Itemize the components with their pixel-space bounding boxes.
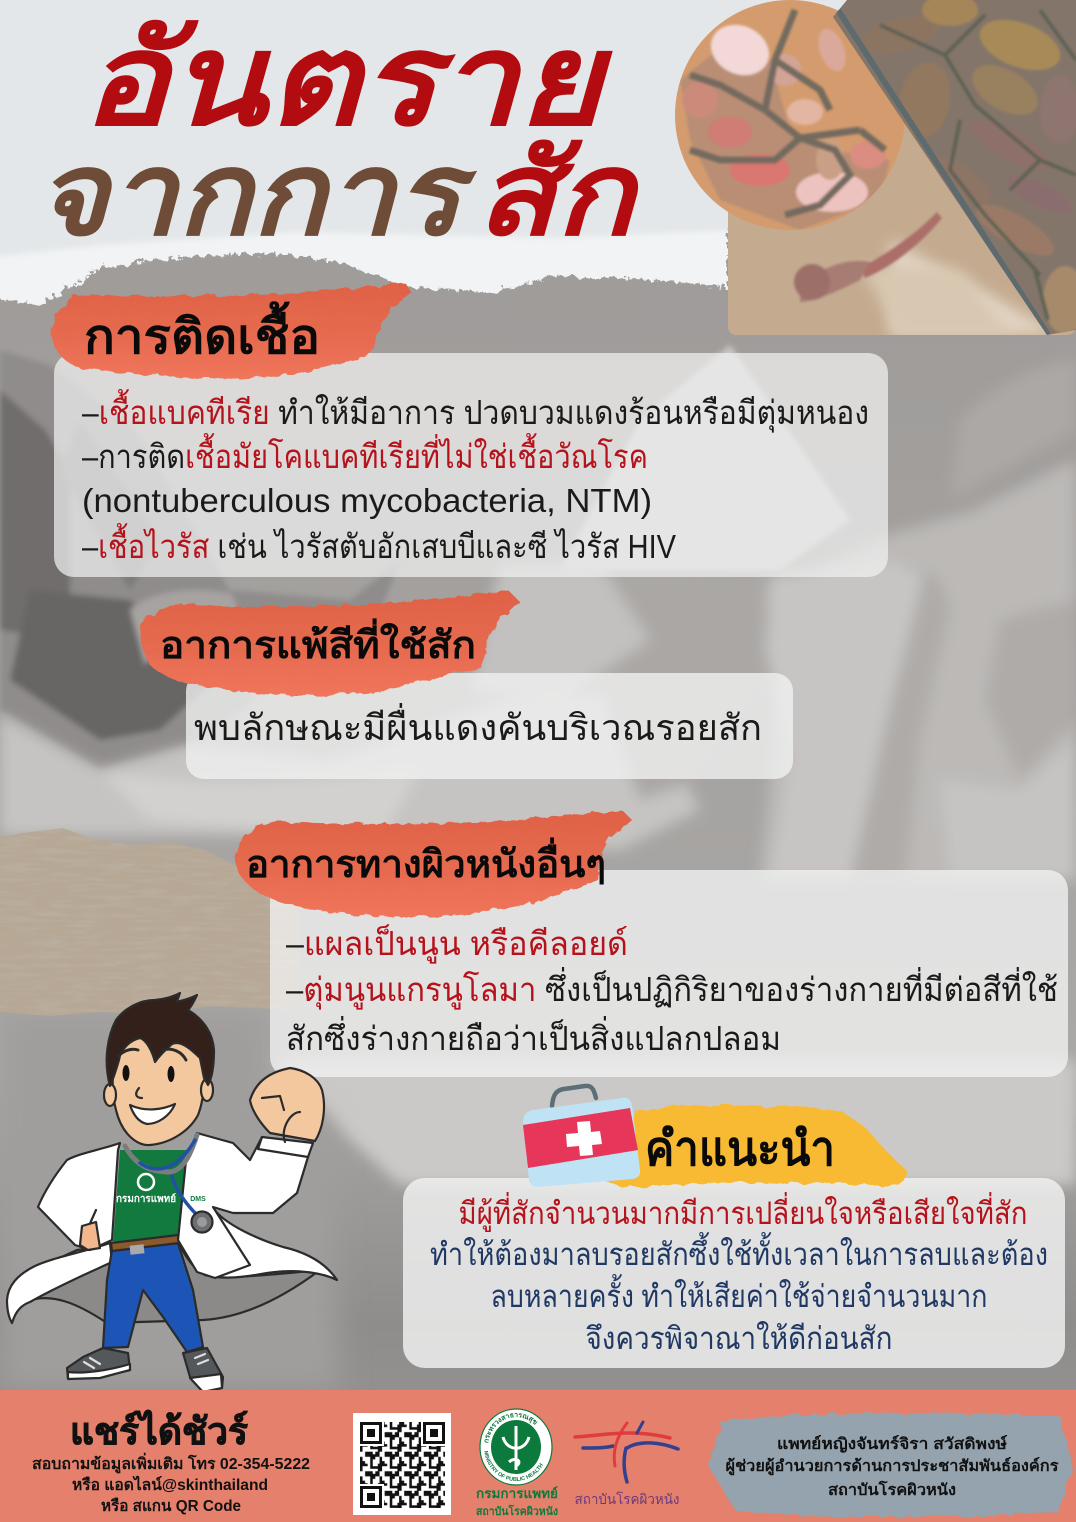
heading: other skin symptoms [235,810,632,917]
pants [103,1243,203,1352]
footer share text: หรือ สแกน QR Code [101,1497,241,1515]
footer share text: สอบถามข้อมูลเพิ่มเติม โทร 02-354-5222 [32,1452,310,1475]
credit badge: ผู้ช่วยผู้อำนวยการด้านการประชาสัมพันธ์องค์กร [726,1457,1059,1477]
logo: Ministry of Public Health: สถาบันโรคผิวหนัง [476,1504,558,1518]
tattoo reaction circle photo [675,0,904,230]
stethoscope [125,1135,197,1172]
shoe right [183,1348,223,1392]
footer band [0,1390,1076,1522]
title: สัก [476,129,640,259]
hand on hip [80,1222,100,1250]
panel: allergy [186,673,793,779]
panel: advice [403,1178,1065,1368]
heading: infection: การติดเชื้อ [84,301,320,364]
panel: allergy: พบลักษณะมีผื่นแดงคันบริเวณรอยสัก [194,703,762,748]
advice text: ลบหลายครั้ง ทำให้เสียค่าใช้จ่ายจำนวนมาก [490,1274,988,1314]
logo: Ministry of Public Health: กระทรวงสาธารณสุข [484,1412,538,1443]
smile [130,1104,175,1124]
tattoo machine [0,350,400,770]
eyebrows [118,1049,186,1060]
coat right tail [177,1208,337,1280]
right glove [760,360,1076,880]
skin symptom list: –ตุ่มนูนแกรนูโลมา ซึ่งเป็นปฏิกิริยาของร่างกายที่มีต่อสีที่ใช้ [286,967,1058,1010]
eyes [122,1065,130,1081]
sand strip [0,828,300,1016]
cuff [258,1137,313,1157]
logo: Institute of Dermatology [574,1422,680,1507]
shirt label: กรมการแพทย์ [116,1193,176,1205]
coat left tail [7,1243,112,1323]
heading: advice [595,1105,908,1188]
hair [107,993,214,1086]
central glove [560,345,850,570]
heading: allergy [139,590,520,695]
icon: first aid kit [523,1086,640,1187]
skin symptom list: –แผลเป็นนูน หรือคีลอยด์ [286,924,628,964]
heading: allergy: อาการแพ้สีที่ใช้สัก [160,618,476,667]
infection list: –เชื้อแบคทีเรีย ทำให้มีอาการ ปวดบวมแดงร้อนหรือมีตุ่มหนอง [82,389,869,433]
heading: infection [51,283,411,379]
belt [111,1235,179,1251]
doctor mascot [7,993,337,1392]
QR code [353,1413,451,1515]
heading: other skin symptoms: อาการทางผิวหนังอื่นๆ [246,837,606,886]
skin symptom list: สักซึ่งร่างกายถือว่าเป็นสิ่งแปลกปลอม [286,1016,781,1057]
title: อันตราย [82,9,613,152]
coat inside shadow [23,1240,320,1323]
credit badge [708,1413,1072,1517]
paper surface [0,0,900,256]
footer share text [32,1409,310,1515]
panel: other skin symptoms [270,870,1068,1077]
footer share text: แชร์ได้ชัวร์ [70,1409,248,1452]
coat right body [178,1133,308,1278]
skin photo: scar [728,120,1076,335]
infection list [82,389,869,565]
logo: Institute of Dermatology: สถาบันโรคผิวหนัง [574,1491,680,1507]
panel: infection [54,353,888,577]
title: จากการ [36,129,478,259]
logo: Ministry of Public Health [476,1408,558,1518]
logo: Ministry of Public Health: MINISTRY OF PUBLIC HEALTH [484,1450,544,1481]
skin symptom list [286,924,1058,1057]
head [113,1030,205,1145]
coat left body [38,1143,120,1250]
lower background [270,1060,1076,1185]
infection list: (nontuberculous mycobacteria, NTM) [82,482,652,519]
top paper [0,0,900,305]
infection list: –เชื้อไวรัส เช่น ไวรัสตับอักเสบบีและซี ไวรัส HIV [82,523,676,565]
footer share text: หรือ แอดไลน์@skinthailand [72,1475,268,1494]
fist [250,1068,324,1141]
DMS label: DMS [190,1196,206,1203]
credit badge: สถาบันโรคผิวหนัง [828,1480,956,1499]
heading: advice: คำแนะนำ [645,1123,835,1176]
advice text [430,1192,1048,1356]
infection list: –การติดเชื้อมัยโคแบคทีเรียที่ไม่ใช่เชื้อวัณโรค [82,433,648,475]
logo: Ministry of Public Health: กรมการแพทย์ [476,1486,558,1501]
title [36,9,640,259]
shirt logo [138,1174,154,1190]
shirt [113,1150,190,1244]
advice text: จึงควรพิจาณาให้ดีก่อนสัก [586,1321,892,1356]
tattoo arm photo [830,0,1076,340]
nose [136,1088,142,1098]
shoe left [67,1348,130,1378]
sleeve [0,565,770,850]
credit badge: แพทย์หญิงจันทร์จิรา สวัสดิพงษ์ [777,1435,1007,1453]
